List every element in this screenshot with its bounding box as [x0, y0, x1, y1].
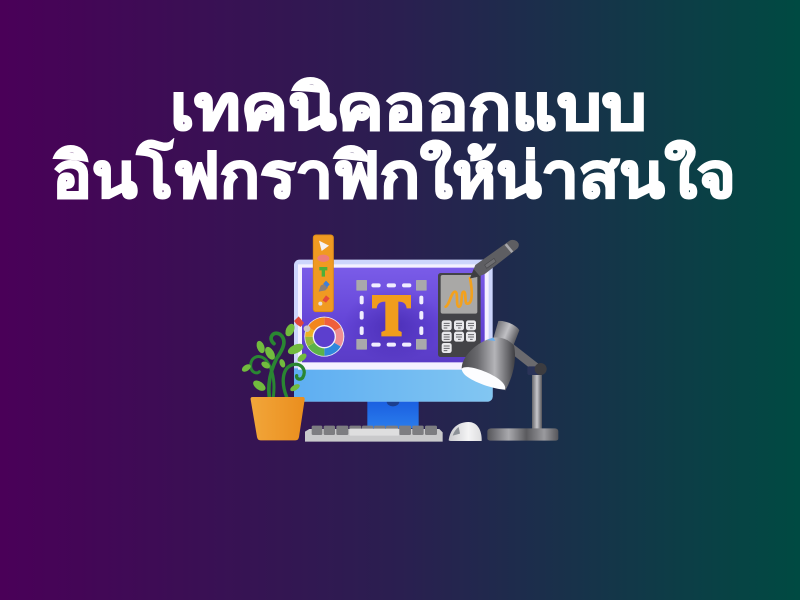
plant [241, 322, 308, 440]
icon: ellipse [317, 255, 329, 262]
title: อินโฟกราฟิกให้น่าสนใจ [52, 142, 736, 211]
title: เทคนิคออกแบบ [170, 74, 647, 143]
icon: green T [319, 267, 327, 277]
desk lamp [462, 321, 558, 441]
icon: red pin [294, 316, 310, 332]
mouse [449, 422, 482, 441]
pot [251, 397, 305, 440]
keyboard [305, 426, 443, 442]
icon: text selection T [356, 280, 427, 350]
title [52, 74, 736, 211]
icon: colour wheel [304, 317, 344, 357]
icon: pin [322, 295, 330, 303]
icon: pen nib [319, 284, 328, 292]
illustration: designer's desktop computer [242, 234, 558, 442]
icon: stylus pen [470, 240, 519, 278]
panel: tablet with squiggle and buttons [438, 273, 481, 357]
icon: cursor [319, 241, 329, 251]
panel: tool bar [313, 235, 333, 312]
monitor [294, 260, 493, 428]
